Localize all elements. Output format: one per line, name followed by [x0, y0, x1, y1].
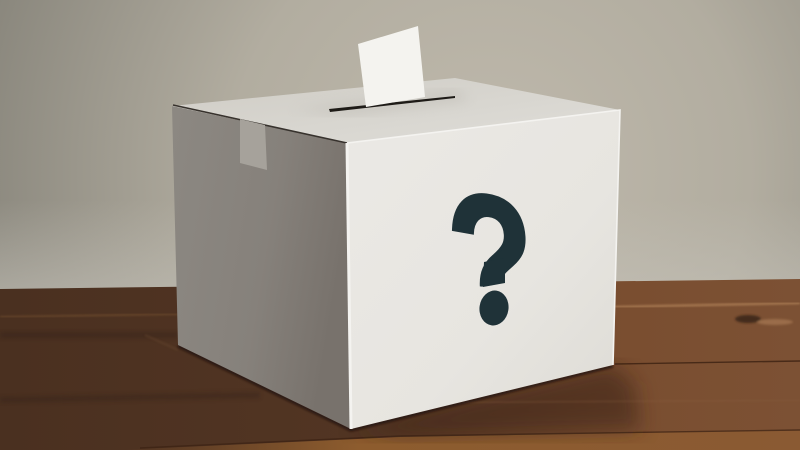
top face soft shading: [290, 90, 470, 115]
ballot box: [172, 26, 620, 429]
wooden table: [0, 279, 800, 450]
ballot paper: [358, 26, 425, 107]
box contact shadow: [178, 346, 613, 430]
box top face: [172, 78, 620, 143]
wood knots: [734, 314, 793, 326]
question mark stem foot: [483, 258, 505, 287]
box right face: [347, 110, 620, 429]
box left face: [172, 106, 351, 429]
question mark dot: [477, 289, 511, 327]
box reflection on table: [351, 365, 640, 436]
ballot slot: [329, 96, 455, 112]
packing tape: [240, 119, 267, 170]
wall background: [0, 0, 800, 295]
plank near front: [120, 430, 800, 450]
question mark: [452, 193, 526, 326]
box edges: [173, 105, 620, 429]
question mark: ?: [441, 152, 542, 371]
